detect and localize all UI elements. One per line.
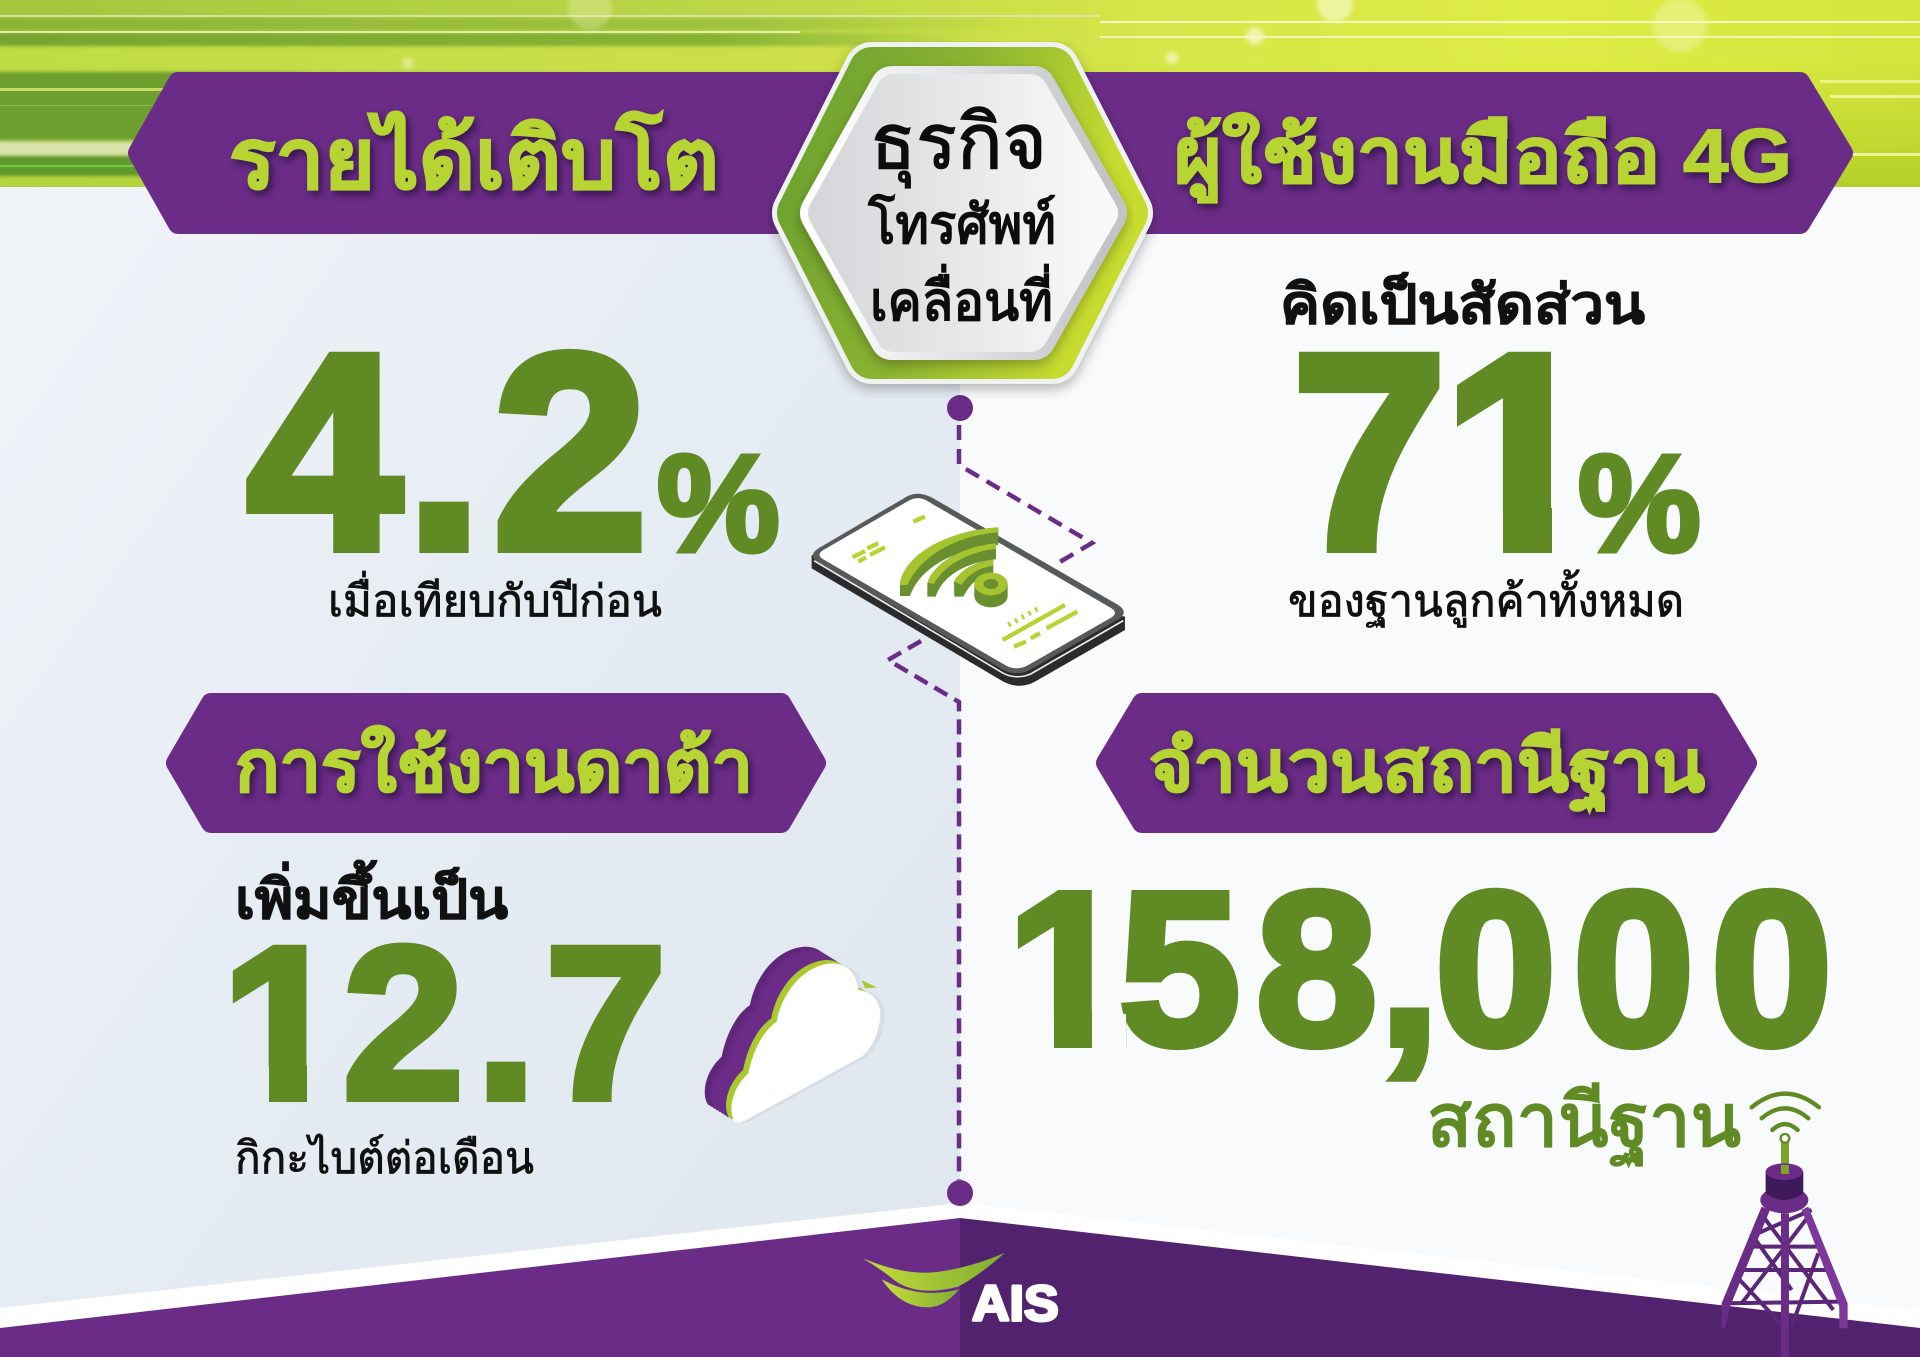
icon: signal tower xyxy=(1722,1094,1848,1357)
heading: data usage: การใช้งานดาต้า xyxy=(235,724,753,807)
badge text line 3: เคลื่อนที่ xyxy=(870,263,1053,332)
dashed connector: hexagon to phone xyxy=(947,395,1092,566)
badge text line 1: ธุรกิจ xyxy=(870,100,1047,188)
badge text line 2: โทรศัพท์ xyxy=(867,193,1056,255)
banner: data usage xyxy=(176,703,816,823)
caption: of total customer base: ของฐานลูกค้าทั้งหมด xyxy=(1288,569,1684,628)
text: increased to: เพิ่มขึ้นเป็น xyxy=(235,860,508,930)
dashed connector: phone to bottom dot xyxy=(888,641,973,1206)
stat: 12.7: 12.7 xyxy=(222,902,666,1144)
heading: 4G mobile users: ผู้ใช้งานมือถือ 4G xyxy=(1174,112,1792,203)
stat: 158,000: 158,000 xyxy=(1007,848,1832,1091)
bottom purple base left xyxy=(0,1218,960,1357)
icon: smartphone with wifi xyxy=(812,494,1125,686)
wifi symbol xyxy=(900,527,1008,607)
screen marks xyxy=(853,517,1077,647)
stat: 12.7 xyxy=(232,942,661,1102)
AIS logo xyxy=(863,1253,1059,1332)
background: right panel xyxy=(960,0,1920,1357)
heading: number of base stations: จำนวนสถานีฐาน xyxy=(1149,727,1705,813)
stat: 71 percent: % xyxy=(1578,427,1701,581)
logo wordmark: AIS xyxy=(972,1276,1059,1332)
caption: base stations: สถานีฐาน xyxy=(1427,1079,1741,1169)
caption: gigabytes per month: กิกะไบต์ต่อเดือน xyxy=(235,1133,534,1183)
icon: cloud xyxy=(705,947,885,1123)
banner: revenue and 4G users header xyxy=(138,82,1843,224)
stat: revenue growth 4.2 percent: % xyxy=(657,427,780,581)
heading: revenue growth: รายได้เติบโต xyxy=(229,111,719,206)
bottom white band xyxy=(0,1203,1920,1357)
signal arcs xyxy=(1752,1094,1819,1130)
caption: compared with previous year: เมื่อเทียบกับปีก่อน xyxy=(328,570,662,626)
bottom purple base right xyxy=(960,1218,1920,1357)
centre hexagon badge xyxy=(800,70,1125,356)
background: left panel xyxy=(0,0,960,1357)
stat: revenue growth 4.2 percent: 4.2 xyxy=(247,296,648,607)
stat: 71 percent xyxy=(1298,352,1700,555)
text: share of: คิดเป็นสัดส่วน xyxy=(1280,273,1645,335)
banner: number of base stations xyxy=(1106,703,1747,823)
top green light-streak band xyxy=(0,0,1920,191)
stat: 71 percent: 71 xyxy=(1292,296,1598,607)
